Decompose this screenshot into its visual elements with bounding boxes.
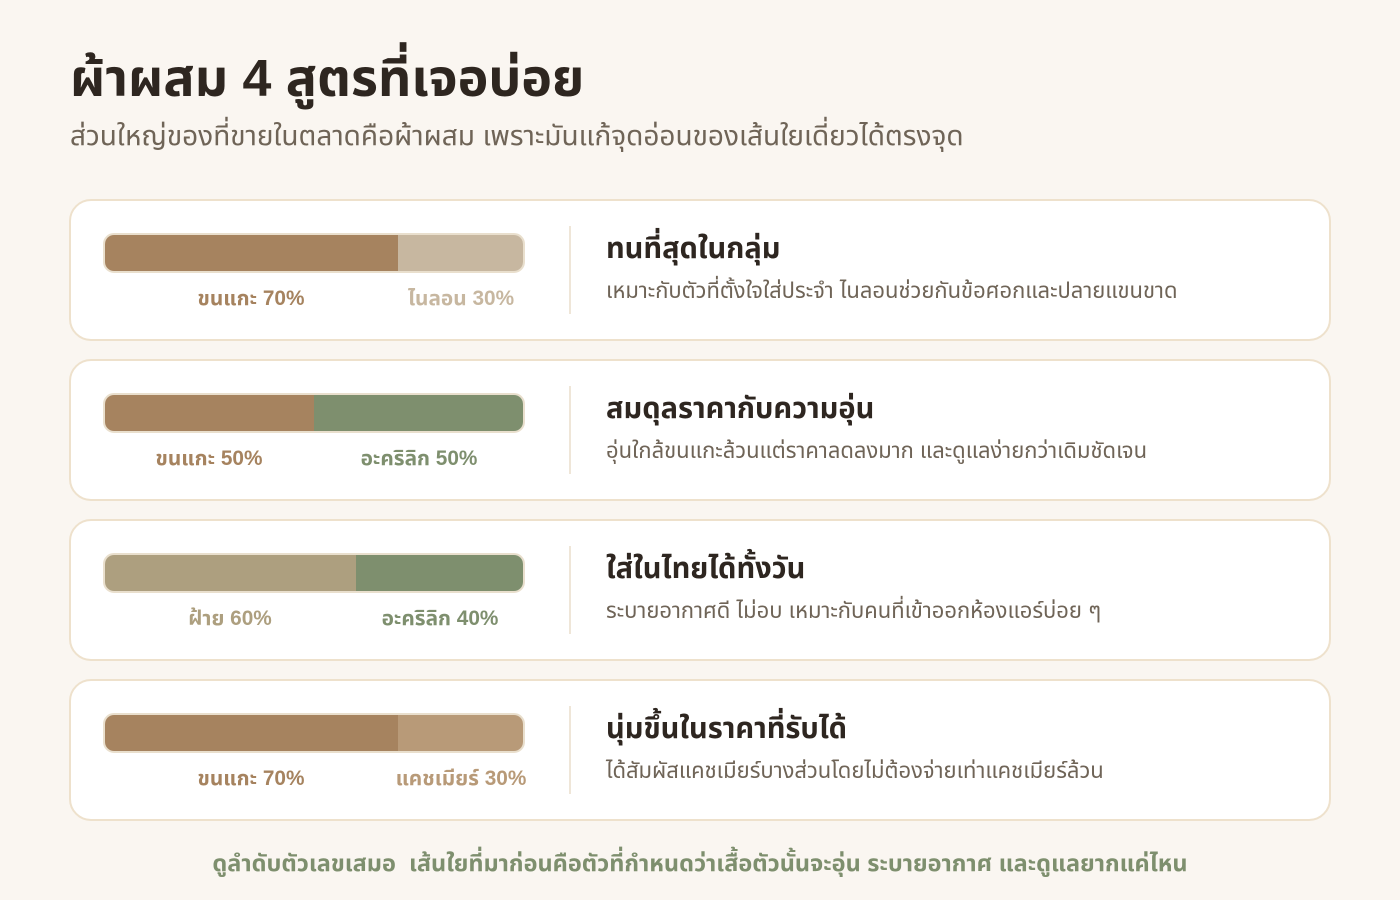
heading: balance: สมดุลราคากับความอุ่น <box>606 393 874 425</box>
bar: wool 70 nylon 30 <box>103 233 525 273</box>
label: nylon 30%: ไนลอน 30% <box>408 287 514 310</box>
bar: wool 70 cashmere 30 <box>103 713 525 753</box>
description: เหมาะกับตัวที่ตั้งใจใส่ประจำ ไนลอนช่วยกันข้อศอกและปลายแขนขาด <box>606 278 1177 303</box>
panel: wool 70 nylon 30 <box>69 199 1331 341</box>
label: cotton 60%: ฝ้าย 60% <box>188 607 272 630</box>
title: ผ้าผสม 4 สูตรที่เจอบ่อย <box>70 49 584 107</box>
description: ระบายอากาศดี ไม่อบ เหมาะกับคนที่เข้าออกห้องแอร์บ่อย ๆ <box>606 598 1101 623</box>
heading: all-day in Thailand: ใส่ในไทยได้ทั้งวัน <box>606 553 805 585</box>
label: acrylic 40%: อะคริลิก 40% <box>382 607 498 630</box>
panel: wool 70 cashmere 30 <box>69 679 1331 821</box>
panel: cotton 60 acrylic 40 <box>69 519 1331 661</box>
label: acrylic 50%: อะคริลิก 50% <box>361 447 477 470</box>
description: อุ่นใกล้ขนแกะล้วนแต่ราคาลดลงมาก และดูแลง่ายกว่าเดิมชัดเจน <box>606 438 1147 463</box>
heading: softer: นุ่มขึ้นในราคาที่รับได้ <box>606 713 847 745</box>
label: wool 70%: ขนแกะ 70% <box>198 287 304 310</box>
bar: cotton 60 acrylic 40 <box>103 553 525 593</box>
description: ได้สัมผัสแคชเมียร์บางส่วนโดยไม่ต้องจ่ายเท่าแคชเมียร์ล้วน <box>606 758 1104 783</box>
panel: wool 50 acrylic 50 <box>69 359 1331 501</box>
bar: wool 50 acrylic 50 <box>103 393 525 433</box>
label: cashmere 30%: แคชเมียร์ 30% <box>396 767 526 790</box>
label: wool 70%: ขนแกะ 70% <box>198 767 304 790</box>
footer note: ดูลำดับตัวเลขเสมอ เส้นใยที่มาก่อนคือตัวที่กำหนดว่าเสื้อตัวนั้นจะอุ่น ระบายอากาศ และดูแลยากแค่ไหน <box>212 850 1188 876</box>
label: wool 50%: ขนแกะ 50% <box>156 447 262 470</box>
subtitle: ส่วนใหญ่ของที่ขายในตลาดคือผ้าผสม เพราะมันแก้จุดอ่อนของเส้นใยเดี่ยวได้ตรงจุด <box>70 120 964 151</box>
heading: most durable: ทนที่สุดในกลุ่ม <box>606 233 780 265</box>
